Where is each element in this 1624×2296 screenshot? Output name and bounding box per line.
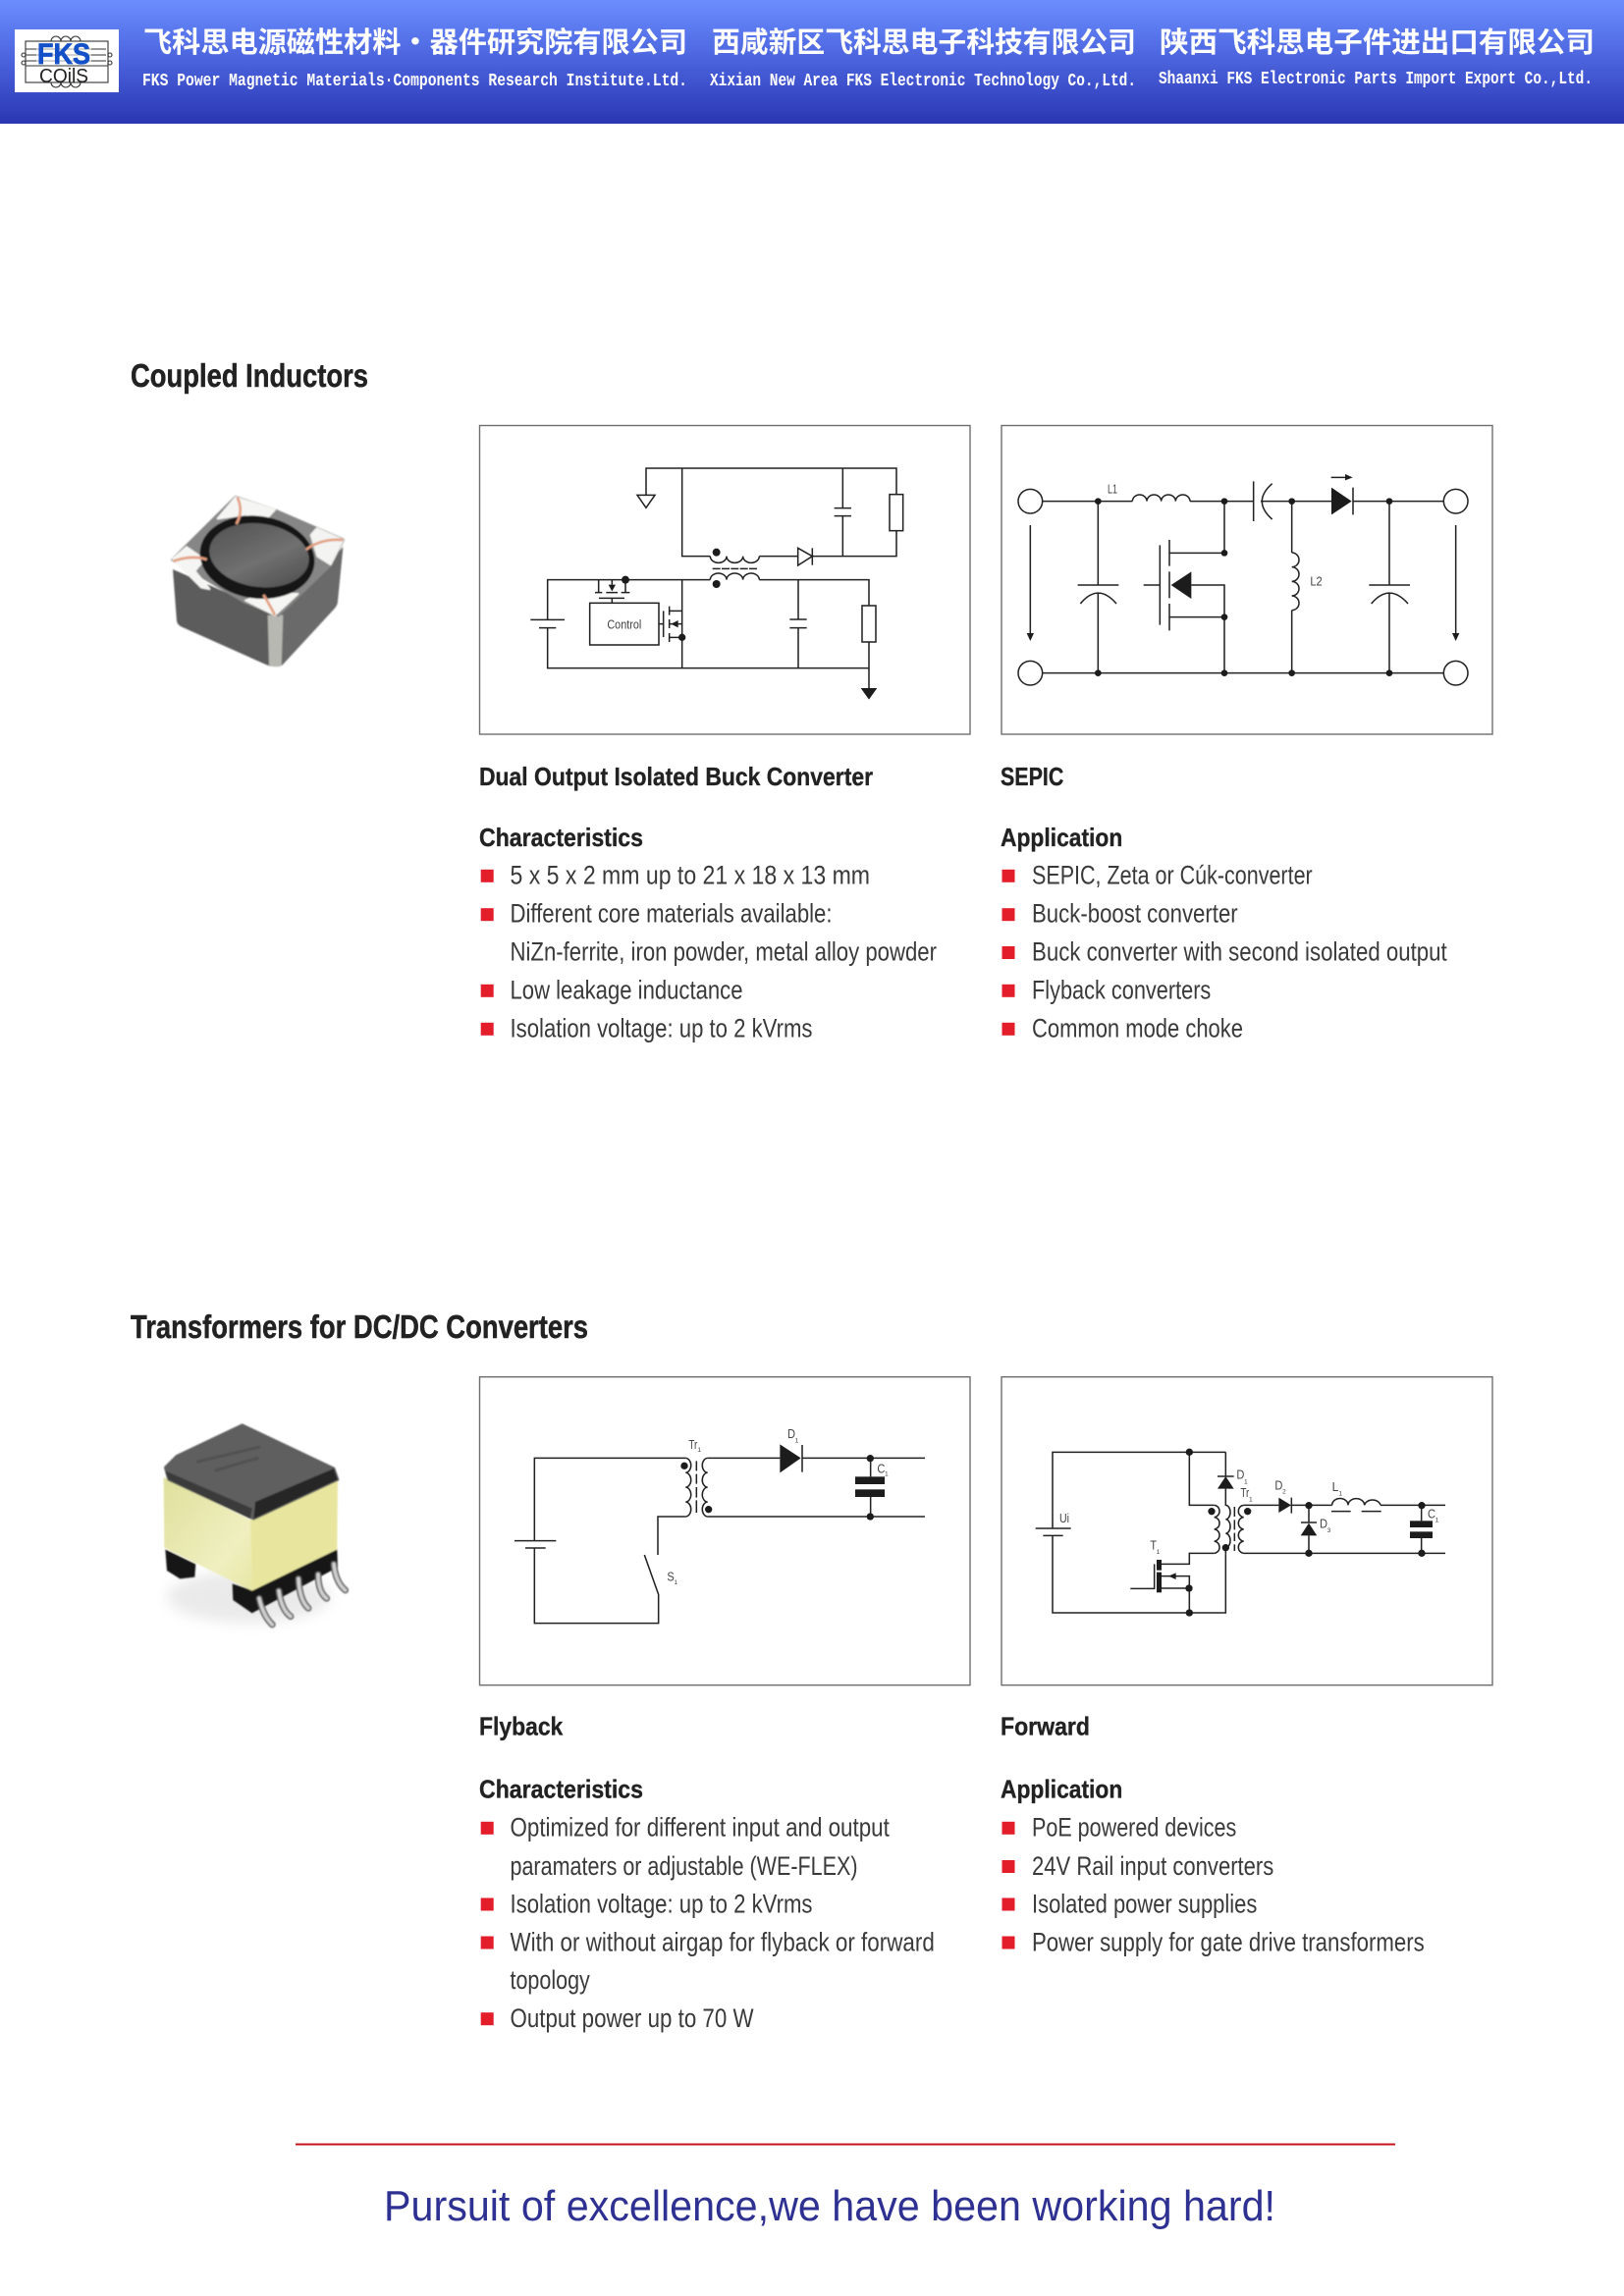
panel: forward circuit: L xyxy=(1332,1480,1338,1494)
text block: forward: Power supply for gate drive transformers xyxy=(1032,1927,1425,1956)
photo: coupled inductor xyxy=(173,498,343,667)
panel: flyback circuit: 1 xyxy=(697,1447,701,1454)
text block: forward: Forward xyxy=(1001,1711,1090,1740)
text block: SEPIC: Buck-boost converter xyxy=(1032,899,1238,929)
company name 3: 陕西飞科思电子件进出口有限公司 xyxy=(1160,20,1595,61)
text block: SEPIC: Common mode choke xyxy=(1032,1014,1243,1043)
text block: forward: PoE powered devices xyxy=(1032,1813,1236,1842)
panel: flyback circuit: D xyxy=(787,1427,795,1441)
panel: forward circuit: 1 xyxy=(1435,1517,1439,1523)
text block: SEPIC: SEPIC, Zeta or Cúk-converter xyxy=(1032,861,1313,890)
footer divider line xyxy=(296,2144,1395,2146)
panel: forward circuit: C xyxy=(1428,1508,1435,1522)
panel: dual output isolated buck converter circuit xyxy=(479,426,970,734)
panel: forward circuit: D xyxy=(1274,1479,1282,1493)
text block: dual output isolated buck converter: Different core materials available: xyxy=(511,899,833,929)
panel: forward circuit: 1 xyxy=(1157,1549,1161,1556)
text block: SEPIC: SEPIC xyxy=(1001,762,1063,791)
panel: forward circuit: T xyxy=(1150,1538,1157,1552)
panel: flyback circuit: S xyxy=(667,1571,675,1584)
text block: dual output isolated buck converter: NiZn-ferrite, iron powder, metal alloy powder xyxy=(511,937,937,967)
company name 2: Xixian New Area FKS Electronic Technology Co.,Ltd. xyxy=(710,72,1136,91)
text block: flyback: Characteristics xyxy=(479,1775,643,1804)
company name 1: FKS Power Magnetic Materials·Components Research Institute.Ltd. xyxy=(142,72,687,91)
logo: FKS Coils: COilS xyxy=(39,66,88,87)
panel: flyback circuit xyxy=(479,1377,970,1685)
text block: flyback: topology xyxy=(511,1965,590,1995)
panel: SEPIC circuit: L1 xyxy=(1108,482,1117,496)
text block: dual output isolated buck converter: Characteristics xyxy=(479,823,643,852)
text block: flyback: With or without airgap for flyback or forward xyxy=(511,1927,935,1956)
panel: forward circuit: 1 xyxy=(1338,1491,1342,1498)
photo: transformer xyxy=(164,1425,346,1625)
text block: forward: 24V Rail input converters xyxy=(1032,1851,1273,1881)
company name 2 xyxy=(710,20,1136,91)
panel: dual output isolated buck converter circuit: Control xyxy=(607,618,641,632)
company name 3 xyxy=(1159,20,1595,89)
panel: forward circuit: D xyxy=(1320,1518,1327,1531)
text block: flyback: paramaters or adjustable (WE-FLEX) xyxy=(511,1851,858,1881)
panel: forward circuit: 1 xyxy=(1244,1479,1248,1486)
logo: FKS Coils xyxy=(15,29,119,92)
text block: flyback: Optimized for different input and output xyxy=(511,1813,890,1842)
panel: flyback circuit: 1 xyxy=(674,1579,677,1586)
panel: forward circuit: Tr xyxy=(1240,1486,1249,1500)
panel: SEPIC circuit xyxy=(1001,426,1492,734)
text block: forward: Isolated power supplies xyxy=(1032,1889,1257,1918)
text block: SEPIC: Buck converter with second isolated output xyxy=(1032,937,1447,967)
panel: forward circuit: D xyxy=(1236,1468,1244,1482)
text block: dual output isolated buck converter xyxy=(479,762,937,1043)
panel: forward circuit: 3 xyxy=(1327,1527,1331,1534)
panel: forward circuit: 1 xyxy=(1249,1497,1253,1504)
company name 1 xyxy=(142,20,687,91)
text block: flyback: Output power up to 70 W xyxy=(511,2003,754,2033)
text block: forward xyxy=(1001,1711,1425,1956)
text block: dual output isolated buck converter: Low leakage inductance xyxy=(511,976,742,1005)
panel: forward circuit: Ui xyxy=(1059,1512,1069,1525)
logo: FKS Coils: FKS xyxy=(37,38,90,71)
text block: forward: Application xyxy=(1001,1775,1122,1804)
panel: flyback circuit: C xyxy=(877,1462,885,1475)
company name 1: 飞科思电源磁性材料·器件研究院有限公司 xyxy=(143,20,687,61)
panel: flyback circuit: Tr xyxy=(688,1438,697,1452)
text block: dual output isolated buck converter: Dual Output Isolated Buck Converter xyxy=(479,762,873,791)
text block: dual output isolated buck converter: 5 x 5 x 2 mm up to 21 x 18 x 13 mm xyxy=(511,861,870,890)
company name 2: 西咸新区飞科思电子科技有限公司 xyxy=(712,20,1136,61)
panel: forward circuit xyxy=(1001,1377,1492,1685)
panel: forward circuit: 2 xyxy=(1282,1489,1286,1496)
panel: SEPIC circuit: L2 xyxy=(1310,574,1323,588)
header banner xyxy=(0,0,1624,124)
heading: Coupled Inductors: Coupled Inductors xyxy=(131,357,368,394)
panel: flyback circuit: 1 xyxy=(885,1471,889,1478)
text block: dual output isolated buck converter: Isolation voltage: up to 2 kVrms xyxy=(511,1014,813,1043)
panel: flyback circuit: 1 xyxy=(795,1438,799,1445)
text block: SEPIC: Application xyxy=(1001,823,1122,852)
text block: flyback: Flyback xyxy=(479,1711,564,1740)
footer slogan: Pursuit of excellence,we have been working hard! xyxy=(384,2182,1275,2230)
text block: SEPIC: Flyback converters xyxy=(1032,976,1211,1005)
text block: SEPIC xyxy=(1001,762,1447,1043)
text block: flyback: Isolation voltage: up to 2 kVrms xyxy=(511,1889,813,1918)
heading: Transformers for DC/DC Converters: Transformers for DC/DC Converters xyxy=(131,1308,588,1345)
text block: flyback xyxy=(479,1711,935,2033)
